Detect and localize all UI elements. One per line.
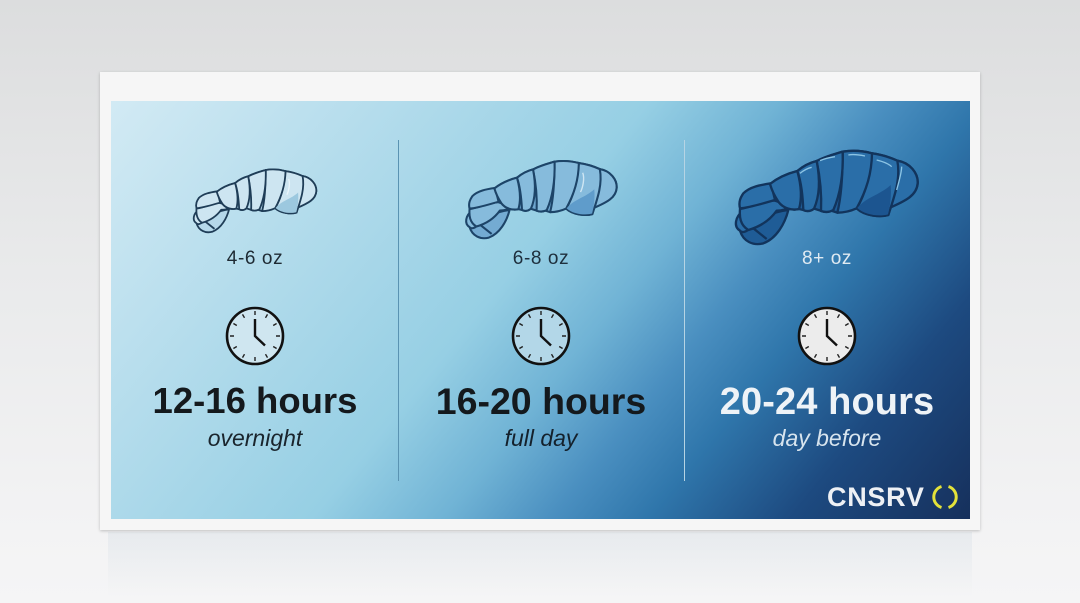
text: full day: full day — [505, 425, 577, 451]
label: 4-6 oz: 4-6 oz — [227, 248, 283, 269]
heading: 16-20 hours: 16-20 hours — [436, 380, 646, 422]
divider right — [684, 140, 685, 481]
text: overnight: overnight — [208, 425, 302, 451]
panel: gradient background — [111, 101, 970, 519]
text: day before: day before — [773, 425, 881, 451]
logo: CNSRV: CNSRV — [827, 482, 925, 512]
icon: small lobster tail — [192, 168, 318, 234]
label: 6-8 oz: 6-8 oz — [513, 248, 569, 269]
heading: 12-16 hours: 12-16 hours — [153, 380, 357, 421]
label: 8+ oz: 8+ oz — [802, 248, 852, 269]
icon: medium lobster tail — [465, 160, 618, 240]
icon: clock 2 — [512, 306, 570, 366]
icon: large lobster tail — [734, 150, 919, 246]
icon: clock 3 — [798, 306, 856, 366]
heading: 20-24 hours: 20-24 hours — [720, 381, 934, 423]
reflection below card — [108, 532, 972, 603]
icon: clock 1 — [226, 306, 284, 366]
divider left — [398, 140, 399, 481]
white card — [100, 72, 980, 530]
